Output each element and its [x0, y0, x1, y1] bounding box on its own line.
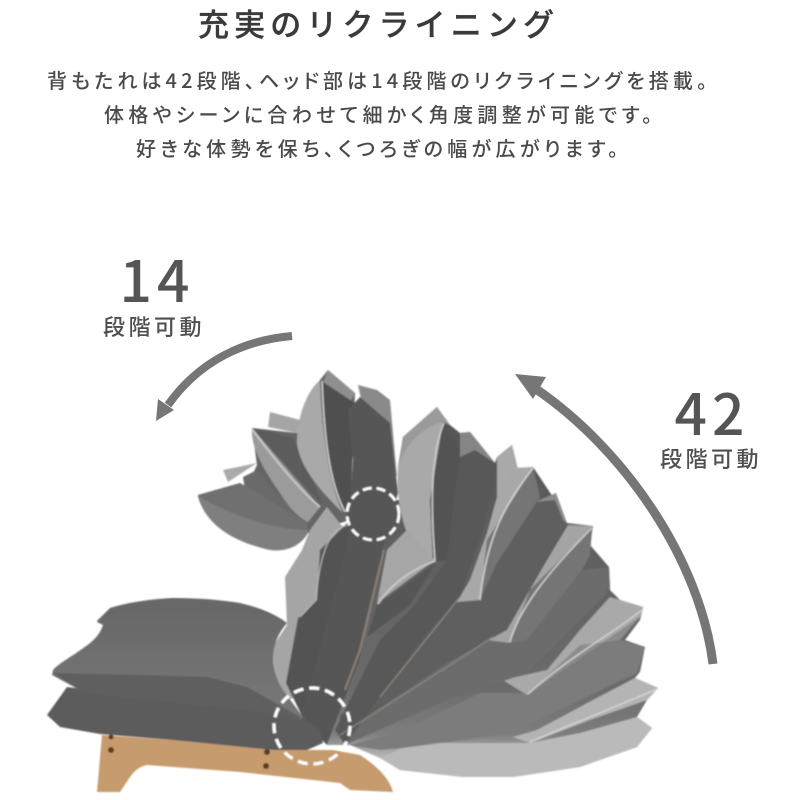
position 3 — [340, 445, 567, 735]
seat base cushion — [47, 687, 323, 750]
wooden leg — [97, 735, 393, 792]
intro text block: 背もたれは42段階、ヘッド部は14段階のリクライニングを搭載。 — [47, 65, 707, 94]
head cushions fan — [198, 370, 355, 550]
label: 42 steps — [660, 370, 762, 474]
head cushion top — [297, 370, 355, 513]
reclining fan of backrest positions — [327, 407, 658, 777]
dashed circle: head joint — [347, 488, 399, 540]
head base cushion — [262, 507, 352, 718]
main backrest — [302, 385, 398, 745]
head cushion lowest — [198, 463, 308, 550]
position 2 — [335, 407, 495, 745]
fan silhouette — [327, 407, 658, 777]
intro text block: 体格やシーンに合わせて細かく角度調整が可能です。 — [104, 99, 652, 128]
reclining sofa illustration — [47, 370, 658, 792]
label: 14 steps: 14 — [120, 237, 194, 319]
seat — [47, 598, 393, 792]
bolts — [108, 734, 270, 769]
position 4 — [345, 525, 610, 745]
position 6 lowest — [380, 678, 658, 777]
head cushion middle — [252, 412, 323, 522]
label: 42 steps: 段階可動 — [660, 442, 762, 474]
arrow: back recline — [515, 374, 713, 664]
seat pillow front band — [53, 673, 300, 720]
position 5 — [350, 597, 645, 750]
head cushions silhouette — [245, 370, 355, 533]
fabric seams — [340, 597, 493, 735]
title: 充実のリクライニング — [198, 0, 554, 45]
dashed circle: back joint — [274, 688, 350, 764]
label: 14 steps — [103, 237, 205, 342]
label: 14 steps: 段階可動 — [103, 310, 205, 342]
arrow: head recline — [156, 336, 292, 421]
intro text block: 好きな体勢を保ち、くつろぎの幅が広がります。 — [136, 133, 618, 162]
seat pillow — [52, 598, 303, 720]
intro text block — [47, 65, 707, 162]
label: 42 steps: 42 — [675, 370, 749, 452]
